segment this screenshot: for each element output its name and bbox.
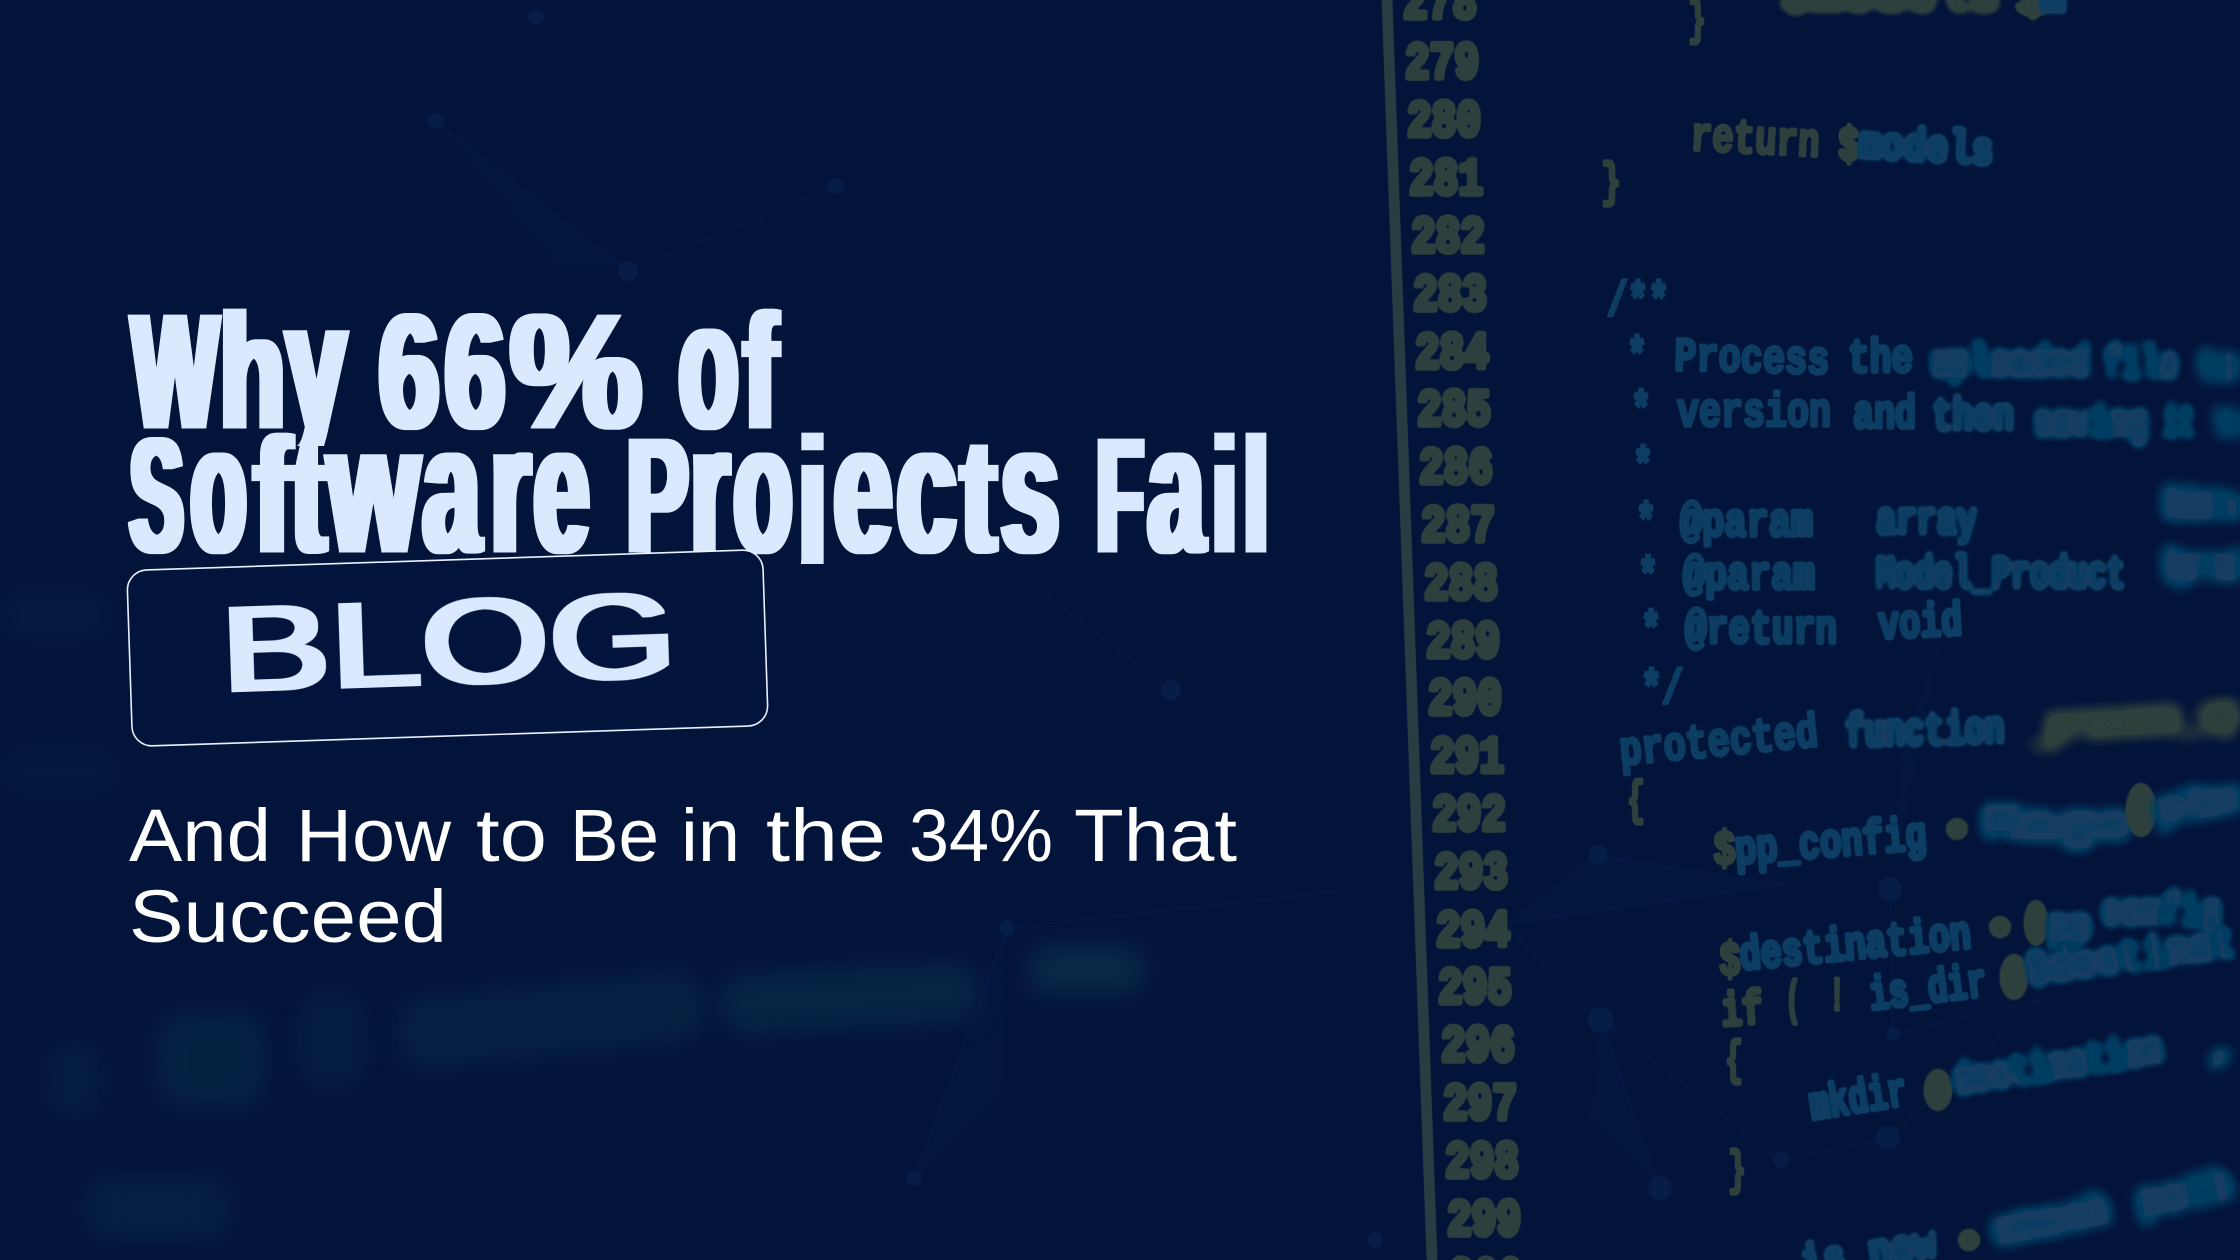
code listing: Model_Product <box>1876 549 2126 603</box>
code line numbers: 280 <box>1407 93 1481 152</box>
blog badge <box>127 549 768 746</box>
title: a <box>1148 385 1205 591</box>
code listing: @return <box>1685 604 1837 658</box>
subtitle: to <box>476 794 547 877</box>
code listing: Mage <box>1983 799 2133 853</box>
code listing: */ <box>1641 664 1683 718</box>
subtitle: 34% <box>909 794 1053 877</box>
code line numbers: 286 <box>1419 440 1493 499</box>
code listing: if <box>1719 984 1765 1041</box>
code listing: void <box>1877 596 1964 654</box>
code line numbers: 281 <box>1409 151 1483 210</box>
title: y <box>286 261 346 467</box>
code line numbers: 291 <box>1430 729 1504 788</box>
title: i <box>1213 404 1236 587</box>
subtitle: the <box>766 794 886 877</box>
code listing: pp_config <box>1733 810 1929 879</box>
code line numbers: 287 <box>1421 498 1495 557</box>
title: F <box>1097 404 1143 587</box>
code listing: saving <box>2033 397 2148 451</box>
title: r <box>491 385 530 591</box>
code listing: file <box>2103 339 2179 393</box>
code line numbers: 289 <box>1426 614 1500 673</box>
title: t <box>291 404 326 587</box>
code line numbers: 288 <box>1424 556 1498 615</box>
code listing <box>1601 0 2240 1260</box>
code listing: @param <box>1680 497 1813 551</box>
code listing: then <box>1932 391 2014 445</box>
code line numbers: 298 <box>1445 1134 1519 1193</box>
title: s <box>1001 385 1059 591</box>
code listing: the <box>1848 333 1913 387</box>
subtitle: in <box>681 794 740 877</box>
code listing: Process <box>1674 331 1830 389</box>
code line numbers: 279 <box>1405 35 1479 94</box>
title: W <box>132 280 218 463</box>
title: % <box>510 280 642 463</box>
title: f <box>744 280 777 463</box>
code line numbers <box>1403 0 1523 1260</box>
code line numbers: 296 <box>1441 1018 1515 1077</box>
code listing: { <box>1725 1035 1743 1089</box>
code line numbers: 295 <box>1438 960 1512 1019</box>
code listing: version <box>1677 387 1831 441</box>
code listing: /** <box>1607 276 1669 330</box>
code listing: { <box>1627 775 1645 829</box>
code listing: * <box>1636 497 1656 551</box>
title: r <box>691 385 729 591</box>
code listing: ( <box>1786 975 1800 1029</box>
subtitle <box>129 794 1237 958</box>
title: t <box>961 404 996 587</box>
code line numbers: 284 <box>1415 325 1489 384</box>
code listing: } <box>1601 157 1621 211</box>
subtitle: Succeed <box>129 875 447 958</box>
code listing: protected <box>1617 707 1821 780</box>
code listing: * <box>1633 441 1653 495</box>
code gutter rule <box>1382 0 1437 1260</box>
code listing: function <box>1844 704 2005 762</box>
code listing: * <box>1631 385 1651 439</box>
code listing: destination <box>1737 909 1973 985</box>
code line numbers: 282 <box>1411 209 1485 268</box>
title: o <box>191 385 246 591</box>
code line numbers: 283 <box>1413 267 1487 326</box>
title: o <box>734 385 792 591</box>
title: 6 <box>445 280 505 463</box>
subtitle: Be <box>570 794 659 877</box>
code listing: it <box>2162 397 2196 451</box>
code line numbers: 297 <box>1443 1076 1517 1135</box>
code line numbers: 290 <box>1428 671 1502 730</box>
title <box>128 308 1266 564</box>
title: f <box>254 404 291 587</box>
code listing: pp <box>2047 901 2092 955</box>
code listing: mkdir <box>1806 1066 1911 1135</box>
code line numbers: 294 <box>1436 903 1510 962</box>
background: faint network mesh <box>428 9 2040 1248</box>
title: h <box>220 280 285 463</box>
code listing: uploaded <box>1930 337 2090 391</box>
code listing: @param <box>1683 550 1815 604</box>
subtitle: And <box>129 794 271 877</box>
code listing: * <box>1641 605 1661 659</box>
code listing: is_dir <box>1866 957 1990 1025</box>
title: P <box>627 404 688 587</box>
code listing: , <box>2200 1019 2240 1073</box>
code listing: * <box>1638 551 1658 605</box>
title: c <box>897 385 956 591</box>
code listing: } <box>1728 1145 1746 1199</box>
code listing: $ <box>1719 936 1741 990</box>
title: l <box>1244 404 1268 587</box>
code listing: $ <box>1838 121 1860 175</box>
code line numbers: 299 <box>1447 1192 1521 1251</box>
code listing: and <box>1853 389 1916 443</box>
title: 6 <box>379 280 439 463</box>
title: o <box>679 261 738 467</box>
background: blurred code text lower left <box>0 590 1144 1241</box>
code line numbers: 292 <box>1432 787 1506 846</box>
title: S <box>130 404 183 587</box>
code listing: $ <box>1713 825 1736 879</box>
subtitle: That <box>1074 794 1237 877</box>
title: e <box>834 385 892 591</box>
code listing: array <box>1876 495 1977 549</box>
blog badge: BLOG <box>218 568 679 717</box>
code line numbers: 293 <box>1434 845 1508 904</box>
subtitle: How <box>296 794 452 877</box>
title: a <box>423 385 481 591</box>
title: j <box>797 404 826 587</box>
code listing: ! <box>1829 971 1845 1025</box>
code listing: models <box>1857 119 1995 180</box>
title: e <box>534 385 589 591</box>
title: w <box>327 385 420 591</box>
code line numbers: 285 <box>1417 382 1491 441</box>
code listing: return <box>1689 111 1821 172</box>
code listing: * <box>1627 331 1647 385</box>
